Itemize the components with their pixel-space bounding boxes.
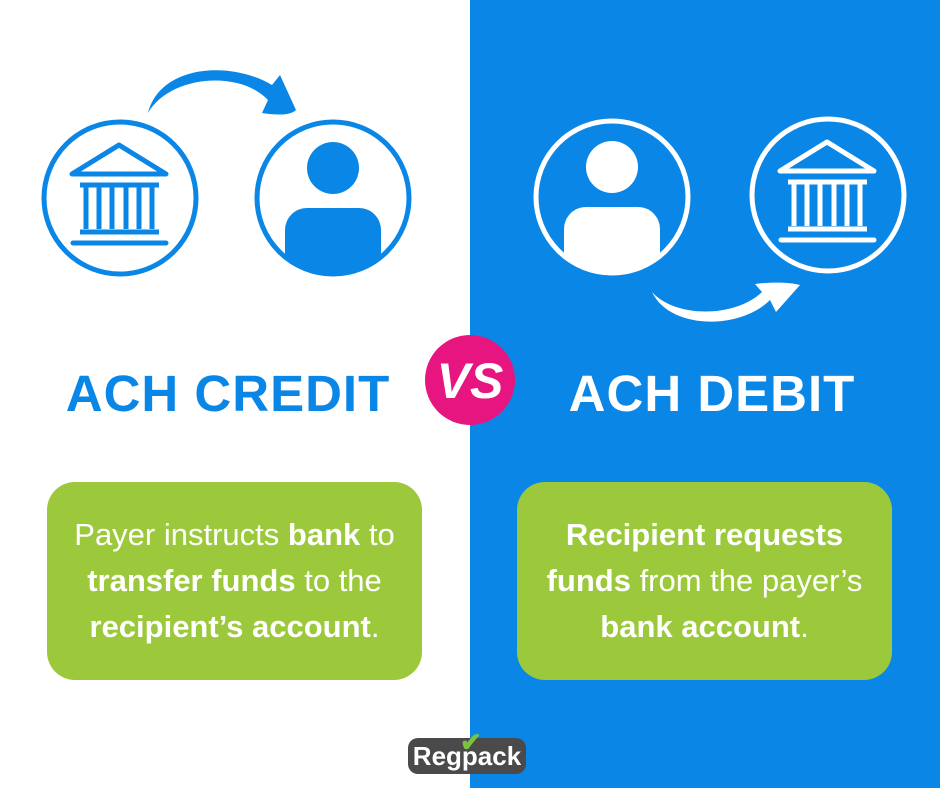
- text box: debit: funds from the payer’s: [547, 563, 862, 598]
- badge: vs: [425, 335, 515, 425]
- arrow: credit: [148, 70, 296, 115]
- text box: debit: Recipient requests: [566, 517, 843, 552]
- arrow: debit: [652, 283, 800, 322]
- heading: ach debit: ACH DEBIT: [569, 365, 855, 422]
- text box: credit: transfer funds to the: [87, 563, 382, 598]
- icons svg: [42, 70, 906, 425]
- text box: credit: [47, 482, 422, 680]
- icon: person right of credit: [257, 122, 409, 288]
- panel: ach debit background: [470, 0, 940, 788]
- logo: regpack: Regpack: [413, 741, 521, 771]
- text box: debit: [517, 482, 892, 680]
- icon: bank left: [44, 122, 196, 274]
- text box: credit: recipient’s account.: [89, 609, 380, 644]
- heading: ach credit: ACH CREDIT: [66, 365, 390, 422]
- badge: vs: VS: [437, 353, 503, 409]
- text box: credit: Payer instructs bank to: [74, 517, 395, 552]
- logo: regpack: ✔: [460, 727, 482, 757]
- text box: debit: bank account.: [600, 609, 809, 644]
- icon: person debit: [536, 121, 688, 287]
- icon: bank debit: [752, 119, 904, 271]
